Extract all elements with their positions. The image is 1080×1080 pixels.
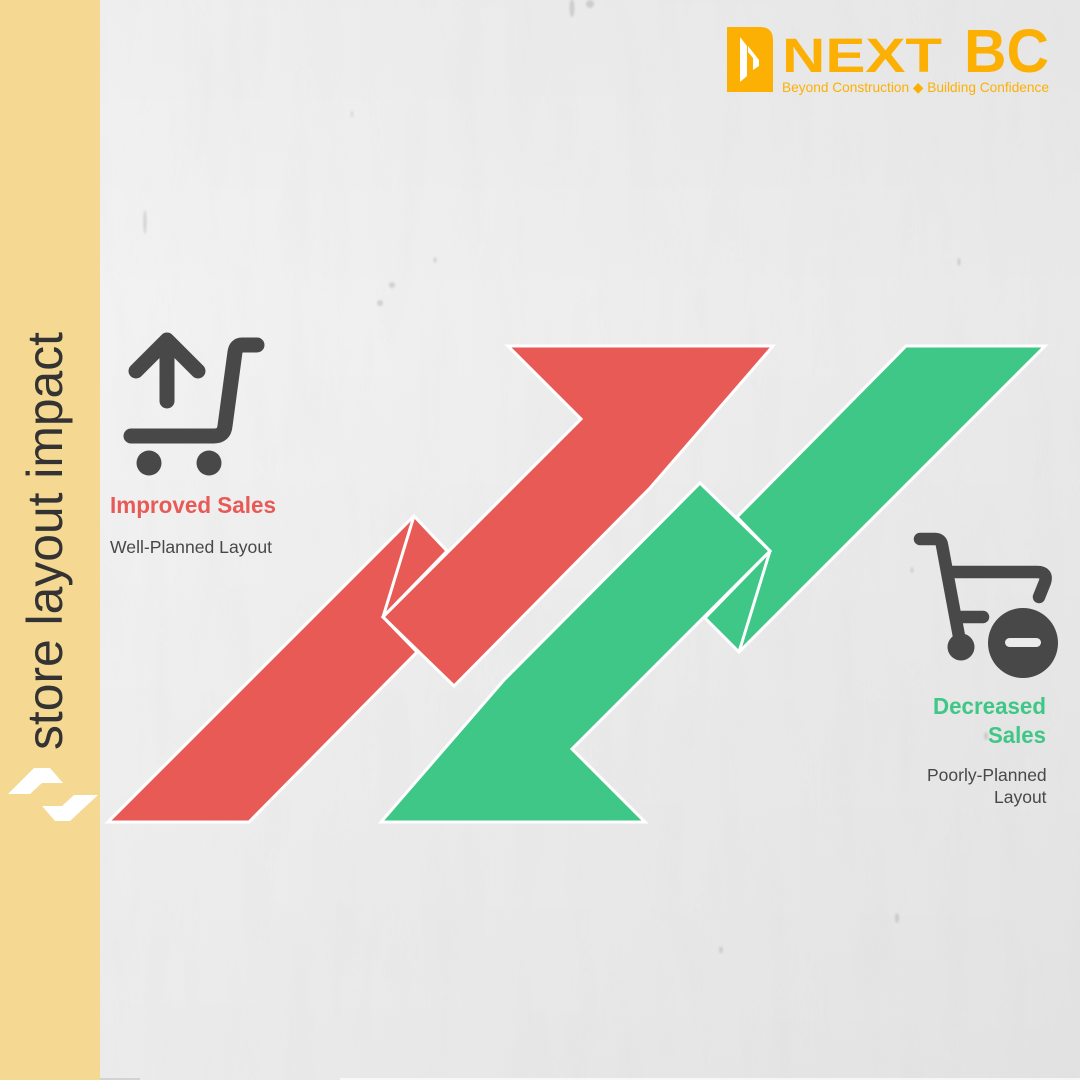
logo mark [727, 27, 773, 92]
logo tagline: Beyond Construction ◆ Building Confidence [782, 79, 1049, 95]
heading: Improved Sales: Improved Sales [110, 492, 276, 518]
label: decreased sales [927, 693, 1047, 807]
icon: cart with minus [920, 539, 1058, 678]
sidebar title: store layout impact: store layout impact [17, 332, 73, 750]
sidebar icon: white chevrons [8, 768, 98, 821]
label: improved sales [110, 492, 276, 557]
red arrow lower band [108, 516, 447, 822]
text: Well-Planned Layout: Well-Planned Layout [110, 537, 272, 557]
green arrow fold line [739, 551, 770, 652]
green arrow lower band with head [381, 483, 770, 822]
red arrow: improved sales [108, 346, 773, 822]
heading: Decreased Sales: Sales [988, 722, 1046, 748]
sidebar panel [0, 0, 100, 1080]
icon: cart with up arrow [131, 340, 257, 476]
text: Poorly-Planned Layout: Poorly-Planned [927, 765, 1047, 785]
logo wordmark NEXT: NEXT [782, 30, 942, 83]
green arrow upper band [705, 346, 1045, 652]
text: Poorly-Planned Layout: Layout [994, 787, 1047, 807]
logo: NEXT BC [727, 17, 1049, 95]
heading: Decreased Sales: Decreased [933, 693, 1046, 719]
red arrow fold line [383, 516, 414, 617]
logo wordmark BC: BC [964, 17, 1049, 85]
green arrow: decreased sales [381, 346, 1045, 822]
red arrow upper band with head [383, 346, 773, 686]
